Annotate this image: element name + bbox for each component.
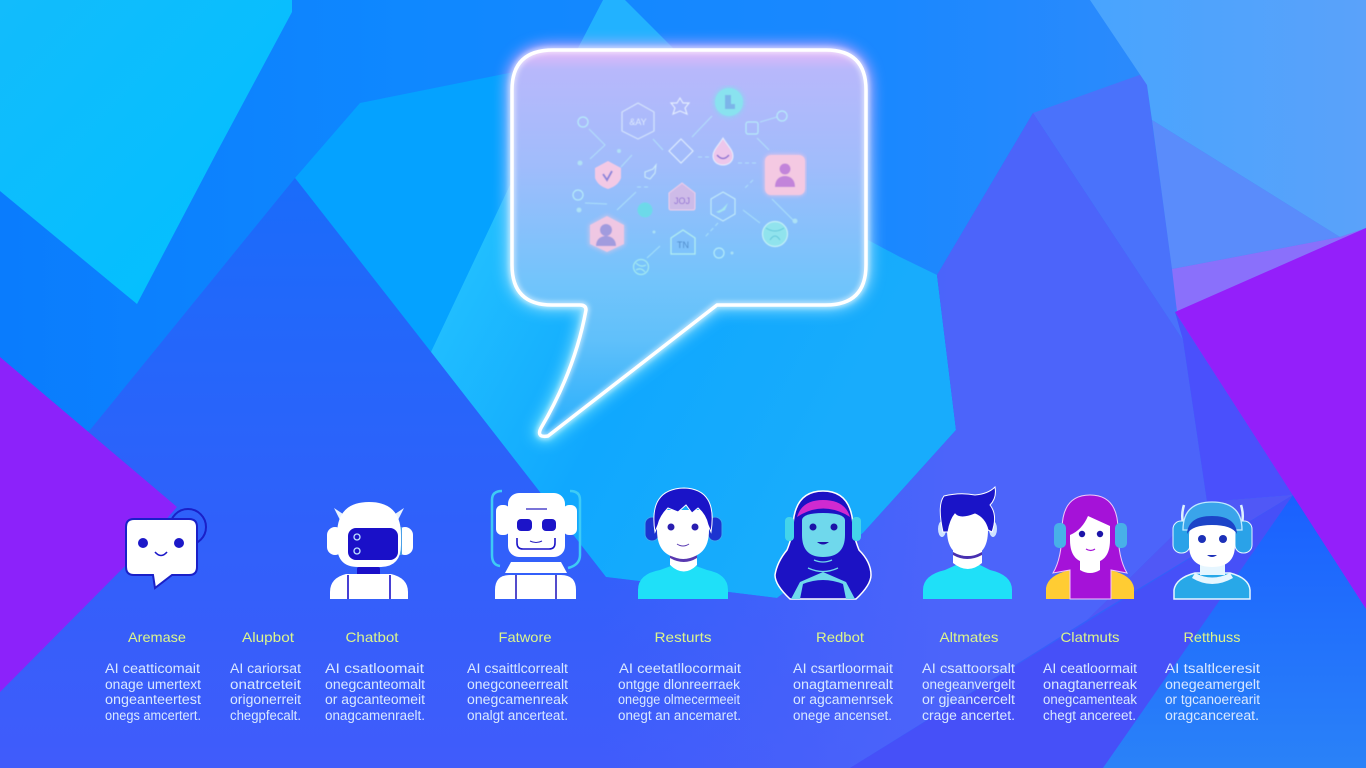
caption 4: Fatwore — [467, 629, 568, 723]
caption 6: Redbot: Redbot — [816, 629, 864, 645]
caption 3: Chatbot: onegcanteomalt — [325, 677, 425, 692]
caption 9: Retthuss: AI tsaltlceresit — [1165, 661, 1260, 676]
caption 1: Aremase — [105, 629, 201, 723]
caption 8: Clatmuts: Clatmuts — [1060, 629, 1120, 645]
character 7: Clatmuts purple-haired woman — [1046, 495, 1134, 599]
icon: droplet — [713, 138, 733, 165]
character 3: square robot — [492, 491, 580, 599]
caption 6: Redbot: onege ancenset. — [793, 708, 892, 723]
caption 3: Chatbot: onagcamenraelt. — [325, 708, 425, 723]
icon: outlined hexagon brush — [711, 192, 735, 221]
caption 9: Retthuss: onegeamergelt — [1165, 677, 1260, 692]
network icons group — [573, 87, 805, 274]
caption 2: Alupbot: AI cariorsat — [230, 661, 301, 676]
caption 3: Chatbot: Chatbot — [346, 629, 399, 645]
caption 7: Altmates: or gjeancercelt — [922, 692, 1015, 707]
caption 1: Aremase: onage umertext — [105, 677, 201, 692]
icon: diamond — [669, 139, 693, 163]
icon: outlined house label — [671, 230, 695, 254]
character 2: helmet robot — [327, 502, 413, 599]
icon: teal circle badge — [714, 87, 744, 117]
character 1: Aremase chat bubble — [126, 509, 206, 588]
icon: outlined hexagon — [622, 103, 654, 139]
icon: teal dot — [638, 202, 652, 218]
icon: pink hexagon user — [589, 215, 625, 253]
icon: flower — [634, 260, 648, 274]
icon: outlined hexagon: &AY — [629, 117, 647, 127]
icon: pink user tile — [765, 155, 805, 195]
character 8: Retthuss child with blue headset — [1173, 502, 1252, 599]
icon: outlined house label: TN — [677, 240, 689, 250]
caption 5: Resturts: AI ceetatllocormait — [619, 661, 741, 676]
caption 1: Aremase: Aremase — [128, 629, 186, 645]
network connector lines — [576, 116, 798, 258]
caption 7: Altmates: crage ancertet. — [922, 708, 1015, 723]
caption 4: Fatwore: Fatwore — [498, 629, 552, 645]
icon: small square and circles — [573, 111, 787, 258]
character 5: Redbot woman with headband — [775, 491, 871, 599]
caption 8: Clatmuts: chegt ancereet. — [1043, 708, 1136, 723]
icon: pink house label: JOJ — [674, 196, 690, 206]
caption 4: Fatwore: AI csaittlcorrealt — [467, 661, 568, 676]
caption 6: Redbot: onagtamenrealt — [793, 677, 893, 692]
caption 2: Alupbot: Alupbot — [242, 629, 294, 645]
character 6: Altmates faceless man — [923, 487, 1012, 599]
caption 4: Fatwore: onegcamenreak — [467, 692, 568, 707]
caption 1: Aremase: ongeanteertest — [105, 692, 201, 707]
icon: globe — [762, 222, 788, 246]
caption 8: Clatmuts: AI ceatloormait — [1043, 661, 1137, 676]
caption 5: Resturts: onegge olmecermeeit — [618, 692, 740, 707]
caption 8: Clatmuts: onegcamenteak — [1043, 692, 1137, 707]
caption 9: Retthuss — [1165, 629, 1260, 723]
caption 9: Retthuss: Retthuss — [1184, 629, 1240, 645]
icon: pink heart shield — [595, 161, 621, 189]
caption 2: Alupbot: chegpfecalt. — [230, 708, 301, 723]
caption 3: Chatbot: AI csatloomait — [325, 661, 424, 676]
caption 3: Chatbot: or agcanteomeit — [325, 692, 425, 707]
caption 1: Aremase: AI ceatticomait — [105, 661, 200, 676]
caption 6: Redbot: AI csartloormait — [793, 661, 893, 676]
caption 2: Alupbot: onatrceteit — [230, 677, 301, 692]
caption 5: Resturts: ontgge dlonreerraek — [618, 677, 740, 692]
speech bubble with network icons — [512, 50, 866, 436]
caption 7: Altmates: Altmates — [940, 629, 998, 645]
caption 5: Resturts: onegt an ancemaret. — [618, 708, 741, 723]
caption 8: Clatmuts: onagtanerreak — [1043, 677, 1137, 692]
caption 4: Fatwore: onegconeerrealt — [467, 677, 568, 692]
icon: pink house label — [669, 183, 695, 210]
caption 7: Altmates: AI csattoorsalt — [922, 661, 1015, 676]
caption 9: Retthuss: oragcancereat. — [1165, 708, 1259, 723]
icon: small leaf — [645, 165, 656, 179]
caption 5: Resturts: Resturts — [654, 629, 712, 645]
caption 3: Chatbot — [325, 629, 425, 723]
caption 4: Fatwore: onalgt ancerteat. — [467, 708, 568, 723]
caption 1: Aremase: onegs amcertert. — [105, 708, 201, 723]
caption 6: Redbot — [793, 629, 893, 723]
caption 5: Resturts — [618, 629, 741, 723]
icon: star — [671, 98, 689, 114]
caption 2: Alupbot — [230, 629, 301, 723]
character 4: Resturts person with headphones — [638, 488, 728, 599]
caption 6: Redbot: or agcamenrsek — [793, 692, 893, 707]
caption 2: Alupbot: origonerreit — [230, 692, 301, 707]
caption 7: Altmates — [922, 629, 1015, 723]
caption 9: Retthuss: or tgcanoerearit — [1165, 692, 1260, 707]
caption 7: Altmates: onegeanvergelt — [922, 677, 1015, 692]
caption 8: Clatmuts — [1043, 629, 1137, 723]
